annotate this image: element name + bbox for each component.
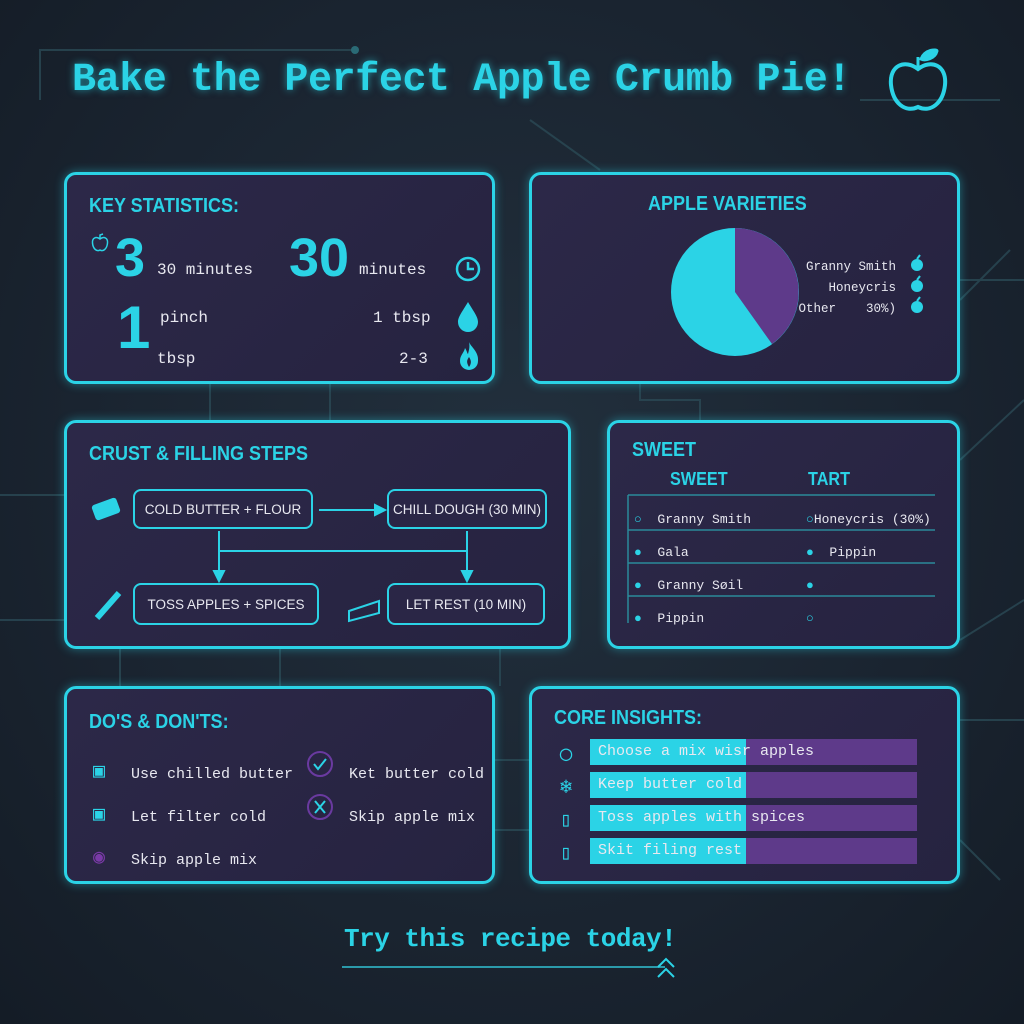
icon: drop bbox=[458, 302, 478, 332]
panel: key statistics: 2-3 bbox=[399, 350, 428, 368]
panel: do's & don'ts: Let filter cold bbox=[131, 809, 266, 826]
bars: Choose a mix wisr apples bbox=[598, 743, 814, 760]
list: ◉ bbox=[93, 847, 105, 870]
step boxes bbox=[133, 489, 313, 529]
panel: crust & filling steps: CHILL DOUGH (30 MIN) bbox=[393, 502, 541, 516]
arrows bbox=[92, 498, 474, 622]
panel: key statistics: 30 minutes bbox=[157, 261, 253, 279]
heading: crust steps: CRUST & FILLING STEPS bbox=[89, 443, 308, 465]
icons: ▯ bbox=[560, 810, 572, 833]
panel: sweet/tart table: ● bbox=[806, 578, 814, 593]
panel: do's & don'ts: Skip apple mix bbox=[349, 809, 475, 826]
panel: sweet/tart table: SWEET bbox=[670, 469, 728, 489]
pie chart bbox=[671, 228, 799, 356]
panel: sweet/tart table: ○ bbox=[806, 611, 814, 626]
stat: 1: 1 bbox=[117, 294, 150, 361]
icon: flame bbox=[460, 342, 478, 370]
heading: core insights: CORE INSIGHTS: bbox=[554, 707, 702, 729]
legend bbox=[798, 260, 896, 316]
panel: do's & don'ts: Skip apple mix bbox=[131, 852, 257, 869]
panel: key statistics: pinch bbox=[160, 309, 208, 327]
panel: crust & filling steps: TOSS APPLES + SPICES bbox=[148, 596, 304, 612]
bars bbox=[590, 739, 917, 864]
heading: dos: DO'S & DON'TS: bbox=[89, 711, 229, 733]
bars: Toss apples with spices bbox=[598, 809, 805, 826]
panel: sweet/tart table: ○ Granny Smith bbox=[634, 512, 751, 527]
panel: key statistics: 1 tbsp bbox=[373, 309, 431, 327]
panel: key statistics: tbsp bbox=[157, 350, 195, 368]
heading: sweet: SWEET bbox=[632, 439, 696, 461]
panel: core insights bbox=[529, 686, 960, 884]
footer line and chevron bbox=[342, 958, 675, 978]
stat: 30: 30 bbox=[289, 228, 349, 288]
list bbox=[93, 761, 105, 870]
panel: apple varieties bbox=[529, 172, 960, 384]
heading: key statistics: KEY STATISTICS: bbox=[89, 195, 239, 217]
icon: clock bbox=[456, 256, 480, 282]
panel: crust & filling steps bbox=[64, 420, 571, 649]
footer call to action: Try this recipe today! bbox=[344, 924, 676, 954]
icon: title apple bbox=[888, 48, 948, 111]
panel: do's & don'ts bbox=[64, 686, 495, 884]
icons: ❄ bbox=[560, 777, 572, 800]
heading: apple varieties: APPLE VARIETIES bbox=[648, 193, 807, 215]
panel: key statistics: minutes bbox=[359, 261, 426, 279]
panel: do's & don'ts: Ket butter cold bbox=[349, 766, 484, 783]
icons bbox=[560, 744, 572, 866]
legend: Other 30%) bbox=[798, 302, 896, 316]
icon: small apple bbox=[92, 233, 108, 252]
bars: Skit filing rest bbox=[598, 842, 742, 859]
panel: key statistics bbox=[64, 172, 495, 384]
legend: Granny Smith bbox=[806, 260, 896, 274]
title: Bake the Perfect Apple Crumb Pie! bbox=[72, 58, 851, 103]
list: ▣ bbox=[93, 804, 105, 827]
panel: sweet/tart table: ○Honeycris (30%) bbox=[806, 512, 931, 527]
panel: sweet/tart table: ● Pippin bbox=[806, 545, 876, 560]
list: ▣ bbox=[93, 761, 105, 784]
icons: ◯ bbox=[560, 744, 572, 767]
stat: 3: 3 bbox=[115, 228, 145, 288]
table bbox=[627, 494, 935, 623]
legend: Honeycris bbox=[828, 281, 896, 295]
panel: sweet/tart table: TART bbox=[808, 469, 850, 489]
panel: sweet/tart table: ● Gala bbox=[634, 545, 689, 560]
panel: do's & don'ts: Use chilled butter bbox=[131, 766, 293, 783]
panel: crust & filling steps: LET REST (10 MIN) bbox=[406, 596, 526, 612]
panel: sweet/tart table: ● Granny Søil bbox=[634, 578, 743, 593]
step boxes: COLD BUTTER + FLOUR bbox=[145, 502, 301, 516]
bars: Keep butter cold bbox=[598, 776, 742, 793]
icons: ▯ bbox=[560, 843, 572, 866]
panel: sweet/tart table: ● Pippin bbox=[634, 611, 704, 626]
panel: sweet/tart table bbox=[607, 420, 960, 649]
